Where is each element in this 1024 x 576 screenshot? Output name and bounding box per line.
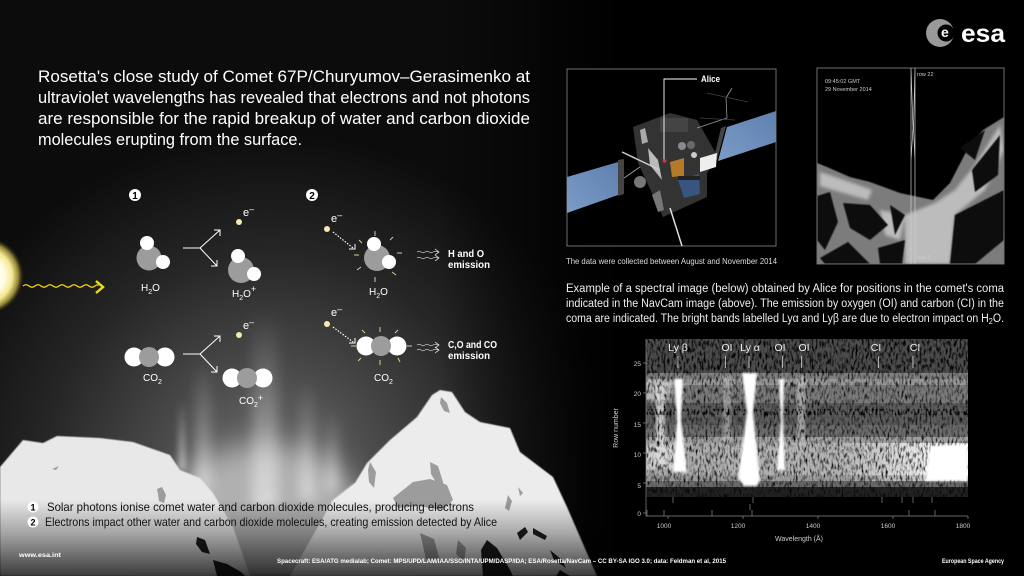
timestamp: 29 November 2014 [825,87,872,93]
arrow: H and O emission [417,249,439,261]
Alice slit [911,68,915,264]
panel: spacecraft image [567,69,776,246]
label: C,O and CO emission: C,O and CO [448,340,497,351]
label: H2O+: H [232,289,239,300]
badge: step 1 [129,189,141,202]
label: excited CO2: 2 [389,379,393,386]
electron: H2O: – [249,204,254,214]
label: CO2+: 2 [254,402,258,409]
logo: esa [926,19,1006,48]
badge: step 2 [306,189,318,202]
x tick labels: 1200 [731,523,746,530]
electron: CO2 [236,317,254,338]
label: H and O emission [448,249,490,271]
comet jets [175,310,355,555]
molecule: CO2 [124,347,174,367]
y tick labels: 15 [634,422,641,429]
description text: O. [993,313,1004,325]
description text: 2 [989,317,993,326]
scan artefacts [647,497,935,516]
molecule: H2O+ [228,249,261,283]
emission rays: CO2 [351,327,412,365]
line labels: CI [871,342,881,354]
badge: step 1: 1 [132,191,138,202]
description text [566,283,1005,326]
NavCam frame [817,68,1004,264]
molecule: H2O [136,236,170,270]
electron impact: CO2 [324,304,355,343]
electron: CO2: e [243,320,249,332]
description text: coma are indicated. The bright bands labelled Lyα and Lyβ are due to electron impact on H [566,313,1024,325]
timestamp [825,79,872,93]
Alice label: Alice [701,74,720,84]
line labels: Ly α [740,342,760,354]
y tick labels: 5 [637,483,641,490]
label: CO2: 2 [158,379,162,386]
y tick labels: 20 [634,391,641,398]
label: H2O: 2 [148,289,152,296]
axis title: wavelength: Wavelength (Å) [775,534,823,543]
Alice marker [663,159,666,163]
electron impact: CO2: e [331,307,337,319]
line labels: OI [774,342,786,354]
y tick labels: 10 [634,452,641,459]
title text [38,68,530,149]
arrow: solar photon [23,281,103,293]
label: H2O: H [141,283,148,294]
bright continuum [925,444,968,481]
title text: molecules erupting from the surface. [38,131,302,149]
Ly beta line [673,379,687,472]
panel: NavCam image [817,68,1004,264]
y tick labels [634,361,641,518]
logo: esa: esa [961,20,1006,48]
spacecraft body [633,113,718,217]
label: H2O+: + [251,284,256,294]
electron: H2O: e [243,207,249,219]
arrow: CO2 split [183,336,220,372]
x tick labels: 1600 [881,523,896,530]
legend item 2: Electrons impact other water and carbon dioxide molecules, creating emission detected by Alice [45,515,497,529]
badge: step 2: 2 [309,191,315,202]
label: CO2: CO [143,373,158,384]
electron impact: CO2: – [337,304,342,314]
arrow: C,O and CO emission [417,342,439,353]
solar panel right [718,111,776,161]
line labels: OI [721,342,733,354]
comet nucleus silhouette [0,390,620,576]
logo: esa: e [941,24,949,40]
comet surface [817,117,1004,264]
molecule: excited CO2 [356,336,406,356]
label: H2O+: 2 [239,295,243,302]
row labels: row 22 [917,72,934,78]
y tick labels: 25 [634,361,641,368]
description text: indicated in the NavCam image (above). The emission by oxygen (OI) and carbon (CI) in the [566,298,1004,310]
row labels: row 8 [917,255,930,261]
Alice pointer [664,79,697,160]
line markers [678,356,913,368]
label: C,O and CO emission [448,340,497,362]
solar panel left [567,162,618,213]
footer: website: www.esa.int [18,552,62,559]
x tick labels: 1800 [956,523,971,530]
label: excited H2O: 2 [376,293,380,300]
row labels [917,72,934,261]
footer: credits: Spacecraft: ESA/ATG medialab; Comet: MPS/UPD/LAM/IAA/SSO/INTA/UPM/DASP/IDA; ESA/Rosetta/NavCam – CC BY-SA IGO 3.0; data: Feldman et al, 2015 [277,558,726,565]
label: excited CO2: CO [374,373,389,384]
molecule: excited H2O [364,237,396,271]
electron: H2O [236,204,254,225]
step 1 diagram [124,189,272,409]
label: excited H2O: H [369,287,376,298]
label: H and O emission: H and O [448,249,484,260]
emission rays: H2O [354,231,402,282]
arrow: H2O split [183,230,220,266]
axes [643,339,968,519]
legend item 2: 2 [30,518,36,528]
caption: data period: The data were collected between August and November 2014 [566,256,777,266]
faint OI and CI lines [722,374,806,443]
label: CO2+: + [258,393,263,403]
line labels: OI [798,342,810,354]
line labels [668,342,920,354]
chart: spectral image [613,339,971,543]
x tick labels [657,523,971,530]
body details [640,118,717,212]
legend text [28,500,497,529]
electron impact: H2O: e [331,213,337,225]
description text: Example of a spectral image (below) obtained by Alice for positions in the comet's coma [566,283,1005,295]
label: H and O emission: emission [448,260,490,271]
antennas and booms [622,88,748,246]
panel mounts [618,126,726,196]
legend item 1: 1 [30,502,36,512]
footer: agency: European Space Agency [942,559,1005,565]
secondary band [646,380,674,469]
label: H2O+: O [243,289,251,300]
title text: Rosetta's close study of Comet 67P/Churyumov–Gerasimenko at [38,68,530,86]
electron impact: H2O: – [337,210,342,220]
legend item 1: Solar photons ionise comet water and carbon dioxide molecules, producing electrons [47,500,474,514]
label: H2O: O [152,283,160,294]
label: CO2+: CO [239,396,254,407]
OI 1304 line [777,379,785,470]
title text: ultraviolet wavelengths has revealed that electrons and not photons [38,89,530,107]
Ly alpha line [738,373,760,486]
sun [0,236,25,316]
electron impact: H2O [324,210,355,249]
label: excited H2O: O [380,287,388,298]
line labels: CI [910,342,920,354]
x tick labels: 1000 [657,523,672,530]
line labels: Ly β [668,342,688,354]
title text: are responsible for the rapid breakup of water and carbon dioxide [38,110,530,128]
label: C,O and CO emission: emission [448,351,490,362]
noise [646,339,968,497]
x tick labels: 1400 [806,523,821,530]
axis title: row number: Row number [613,407,620,448]
timestamp: 09:45:02 GMT [825,79,861,85]
step 2 diagram [306,189,497,386]
electron: CO2: – [249,317,254,327]
spectrogram [646,339,968,497]
molecule: CO2+ [222,368,272,388]
y tick labels: 0 [637,511,641,518]
